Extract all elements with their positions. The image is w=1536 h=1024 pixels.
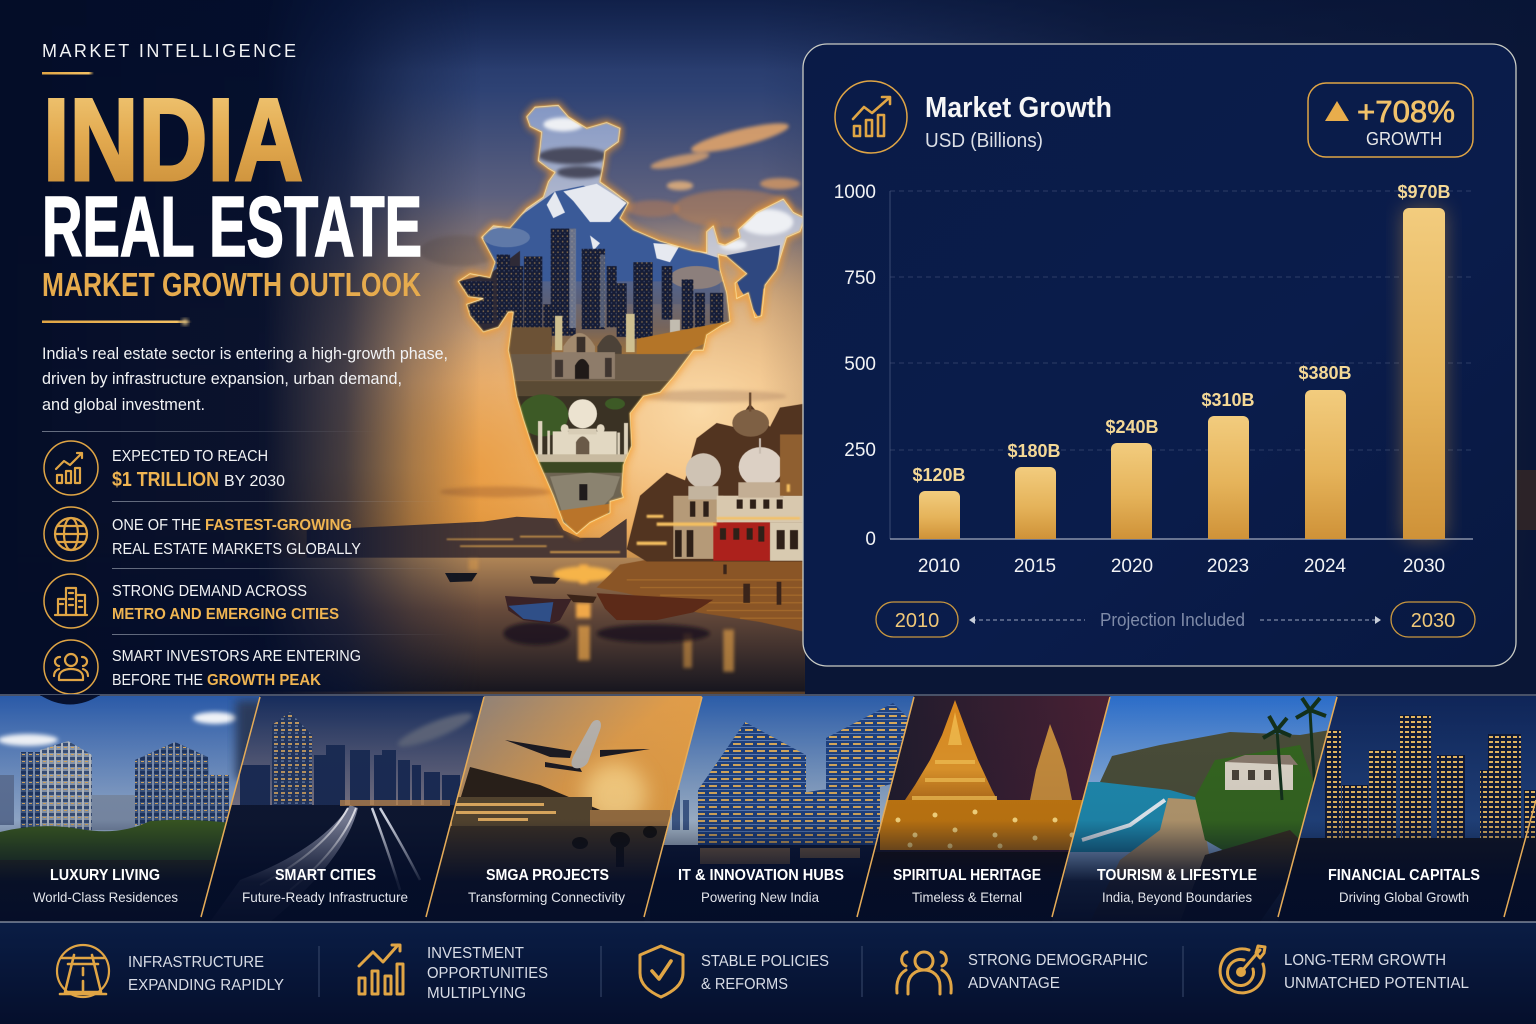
text: stable policies: STABLE POLICIES <box>701 953 829 970</box>
text: demographic <box>968 952 1148 992</box>
chart: year labels <box>918 556 1445 577</box>
clouds <box>420 118 800 497</box>
text: infrastructure <box>128 954 284 994</box>
scene: river ghats <box>0 118 805 692</box>
text: strong demand: METRO AND EMERGING CITIES <box>112 606 339 623</box>
ghat steps <box>597 555 803 632</box>
badge: +708% growth: GROWTH <box>1366 129 1442 149</box>
text: strong demand <box>112 583 339 623</box>
intro paragraph: driven by infrastructure expansion, urban demand, <box>42 369 402 388</box>
gold accent line <box>42 72 94 74</box>
panel heading <box>925 92 1112 152</box>
chart: bars <box>919 208 1445 539</box>
bottom shade of photos <box>0 696 1536 922</box>
label: mega projects: Transforming Connectivity <box>468 889 625 905</box>
chart: value labels: $240B <box>1105 417 1159 437</box>
chart: y axis and gridlines: 750 <box>844 268 876 289</box>
panel: market growth chart <box>803 44 1516 666</box>
photo: mega projects <box>438 696 702 877</box>
label: IT and innovation hubs: IT & INNOVATION HUBS <box>678 867 844 884</box>
text: smart investors: BEFORE THE <box>112 672 203 689</box>
chart: year labels: 2030 <box>1403 556 1445 577</box>
feature: stable policies <box>640 946 829 997</box>
feature: long-term growth <box>1220 946 1469 993</box>
boats <box>503 622 710 645</box>
label: financial capitals <box>1328 867 1480 905</box>
photo: spiritual heritage <box>869 696 1110 874</box>
chart: year labels: 2010 <box>918 556 960 577</box>
map monument <box>510 354 697 381</box>
label: mega projects: SMGA PROJECTS <box>486 867 609 884</box>
label: smart cities: SMART CITIES <box>275 867 376 884</box>
label: tourism and lifestyle <box>1097 867 1257 905</box>
photo: tourism and lifestyle <box>1057 696 1337 906</box>
map outline <box>458 105 805 534</box>
far shore <box>307 517 627 559</box>
label: financial capitals: Driving Global Growth <box>1339 889 1469 905</box>
intro paragraph: India's real estate sector is entering a high-growth phase, <box>42 344 448 363</box>
icon: investors <box>44 640 98 694</box>
photo: luxury living <box>0 696 260 876</box>
text: long-term growth: LONG-TERM GROWTH <box>1284 952 1446 969</box>
text: fastest-growing <box>112 517 361 558</box>
label: tourism and lifestyle: India, Beyond Boundaries <box>1102 889 1252 905</box>
icon: investment chart <box>359 945 403 994</box>
text: fastest-growing: FASTEST-GROWING <box>205 517 352 534</box>
gold divider <box>42 319 192 325</box>
text: investment: MULTIPLYING <box>427 985 526 1002</box>
label: luxury living: LUXURY LIVING <box>50 867 160 884</box>
label: IT and innovation hubs: Powering New India <box>701 889 819 905</box>
text: expected to reach: BY 2030 <box>224 473 285 490</box>
label: smart cities <box>242 867 408 905</box>
title: INDIA: INDIA <box>43 74 303 205</box>
India map collage <box>440 101 810 538</box>
chart: year labels: 2020 <box>1111 556 1153 577</box>
icon: growth chart <box>44 441 98 495</box>
timeline: 2010 to 2030 projection <box>876 602 1475 637</box>
panel heading: USD (Billions) <box>925 130 1043 152</box>
feature: infrastructure <box>57 945 284 997</box>
label: luxury living <box>33 867 178 905</box>
icon: growth circle <box>835 81 907 153</box>
chart: y axis and gridlines <box>834 182 1473 550</box>
label: smart cities: Future-Ready Infrastructure <box>242 889 408 905</box>
text: stable policies <box>701 953 829 993</box>
bullet: fastest-growing <box>44 507 361 561</box>
icon: people <box>897 952 951 994</box>
bullet: smart investors <box>44 640 361 694</box>
label: mega projects <box>468 867 625 905</box>
chart: y axis and gridlines: 250 <box>844 440 876 461</box>
ghat buildings <box>627 404 803 561</box>
text: expected to reach: EXPECTED TO REACH <box>112 448 268 465</box>
chart: year labels: 2024 <box>1304 556 1347 577</box>
icon: shield <box>640 946 683 997</box>
left dark fade <box>0 0 480 696</box>
badge: +708% growth: +708% <box>1357 94 1455 129</box>
label: spiritual heritage: SPIRITUAL HERITAGE <box>893 867 1041 884</box>
chart: value labels: $180B <box>1007 441 1061 461</box>
feature: demographic <box>897 952 1148 994</box>
intro paragraph <box>42 344 448 414</box>
map southern temple <box>544 472 623 528</box>
icon: target <box>1220 946 1265 993</box>
map city <box>458 250 520 332</box>
text: smart investors: GROWTH PEAK <box>207 672 321 689</box>
text: expected to reach <box>112 448 285 491</box>
text: infrastructure: EXPANDING RAPIDLY <box>128 977 284 994</box>
title: REAL ESTATE: REAL ESTATE <box>42 180 422 275</box>
icon: buildings <box>44 574 98 628</box>
map mountains <box>477 186 720 304</box>
panel heading: Market Growth <box>925 92 1112 124</box>
text: strong demand: STRONG DEMAND ACROSS <box>112 583 307 600</box>
label: luxury living: World-Class Residences <box>33 889 178 905</box>
text: demographic: STRONG DEMOGRAPHIC <box>968 952 1148 969</box>
map glow <box>458 105 805 534</box>
chart: value labels: $120B <box>912 465 966 485</box>
text: fastest-growing: ONE OF THE <box>112 517 201 534</box>
chart: y axis and gridlines: 500 <box>844 354 876 375</box>
timeline: 2010 to 2030 projection: 2030 <box>1411 610 1455 632</box>
chart: value labels: $970B <box>1397 182 1451 202</box>
label: financial capitals: FINANCIAL CAPITALS <box>1328 867 1480 884</box>
chart: y axis and gridlines: 1000 <box>834 182 876 203</box>
chart: value labels: $310B <box>1201 390 1255 410</box>
bottom band <box>0 922 1536 1024</box>
eyebrow: market intelligence: MARKET INTELLIGENCE <box>42 41 296 61</box>
map sky <box>482 106 802 272</box>
text: demographic: ADVANTAGE <box>968 975 1060 992</box>
chart: y axis and gridlines: 0 <box>865 529 876 550</box>
text: investment: INVESTMENT <box>427 945 524 962</box>
feature: investment <box>359 945 548 1002</box>
text: investment: OPPORTUNITIES <box>427 965 548 982</box>
text: smart investors <box>112 648 361 689</box>
subtitle: MARKET GROWTH OUTLOOK <box>42 266 421 303</box>
list rules <box>42 431 452 635</box>
label: IT and innovation hubs <box>678 867 844 905</box>
icon: globe <box>44 507 98 561</box>
text: long-term growth: UNMATCHED POTENTIAL <box>1284 975 1469 992</box>
label: spiritual heritage <box>893 867 1041 905</box>
text: fastest-growing: REAL ESTATE MARKETS GLOBALLY <box>112 541 361 558</box>
text: expected to reach: $1 TRILLION <box>112 469 219 491</box>
label: spiritual heritage: Timeless & Eternal <box>912 889 1022 905</box>
photo: smart cities <box>218 696 484 891</box>
map Taj Mahal <box>517 396 642 455</box>
photo strip <box>0 694 1536 922</box>
timeline: 2010 to 2030 projection: 2010 <box>895 610 939 632</box>
text: stable policies: & REFORMS <box>701 976 788 993</box>
chart: year labels: 2015 <box>1014 556 1056 577</box>
chart: year labels: 2023 <box>1207 556 1249 577</box>
text: infrastructure: INFRASTRUCTURE <box>128 954 264 971</box>
icon: highway <box>57 945 109 997</box>
slanted dividers <box>201 697 1536 917</box>
chart: value labels: $380B <box>1298 363 1352 383</box>
bullet: strong demand <box>44 574 339 628</box>
text: long-term growth <box>1284 952 1469 992</box>
background sky <box>0 0 1536 696</box>
text: smart investors: SMART INVESTORS ARE ENTERING <box>112 648 361 665</box>
water <box>0 558 805 692</box>
timeline: 2010 to 2030 projection: Projection Included <box>1100 610 1245 630</box>
photo: financial capitals <box>1293 696 1536 864</box>
label: tourism and lifestyle: TOURISM & LIFESTYLE <box>1097 867 1257 884</box>
bullet: expected to reach <box>44 441 285 495</box>
intro paragraph: and global investment. <box>42 395 205 414</box>
photo: IT and innovation hubs <box>649 696 914 904</box>
text: investment <box>427 945 548 1002</box>
badge: +708% growth <box>1308 83 1473 157</box>
chart: value labels <box>912 182 1451 485</box>
bubble over photo strip <box>40 695 100 704</box>
